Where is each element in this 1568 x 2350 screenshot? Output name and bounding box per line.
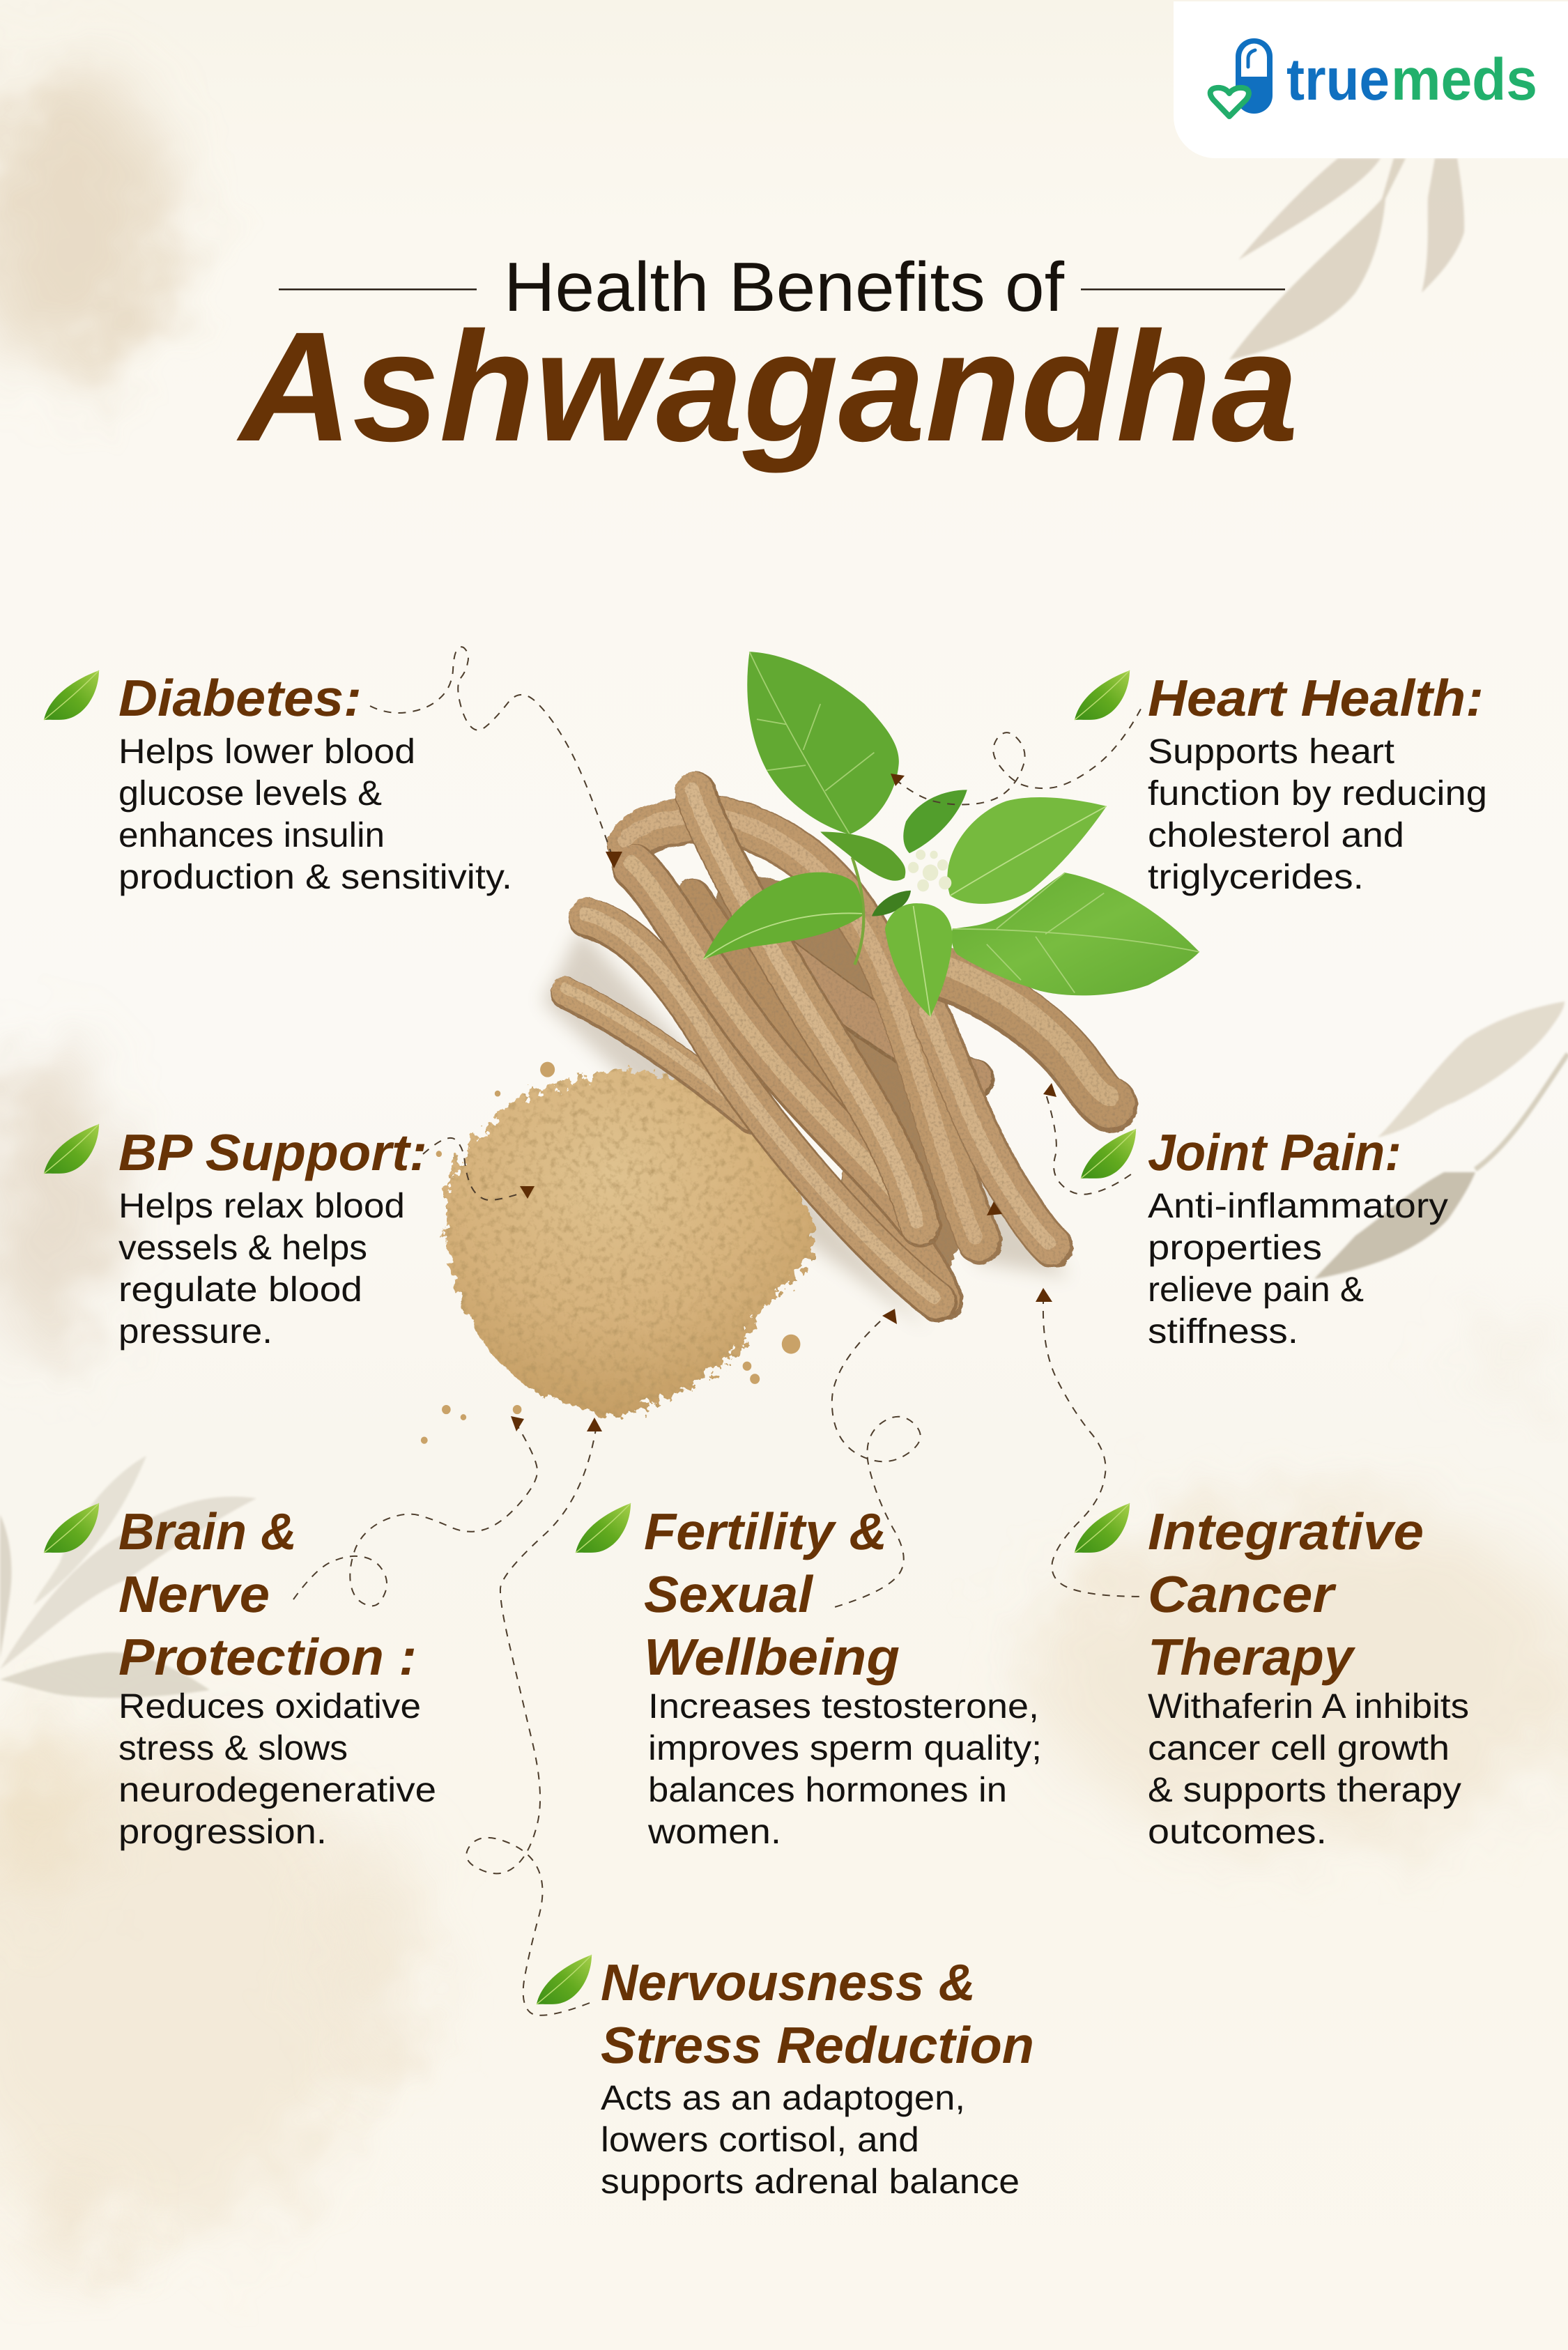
body text: improves sperm quality; [648, 1728, 1042, 1767]
body text: Anti-inflammatory [1148, 1186, 1448, 1225]
body text: cancer cell growth [1148, 1728, 1450, 1767]
body text: properties [1148, 1228, 1322, 1267]
powder mound [421, 1062, 815, 1444]
stem [852, 857, 863, 965]
dashed connector: nervousness [466, 1425, 597, 2015]
watercolour leaves: right middle [1314, 1001, 1568, 1279]
body text [1148, 732, 1487, 896]
benefit: heart health [1075, 669, 1487, 896]
body text: triglycerides. [1148, 857, 1364, 896]
body text: Withaferin A inhibits [1148, 1687, 1469, 1726]
powder crumbs [421, 1062, 800, 1444]
body text: Helps lower blood [118, 732, 415, 771]
title main word: Ashwagandha [236, 300, 1298, 474]
central image: powder, roots and leaves [421, 652, 1199, 1444]
heading: Heart Health: [1148, 669, 1484, 727]
heading: Nerve [118, 1565, 270, 1623]
body text: neurodegenerative [118, 1770, 436, 1809]
body text: outcomes. [1148, 1812, 1327, 1851]
heading: Wellbeing [644, 1628, 900, 1686]
dashed connector: integrative cancer therapy [1043, 1301, 1139, 1597]
leaf: upper right [947, 797, 1107, 904]
heading: Sexual [644, 1565, 813, 1623]
leaf: top big [747, 652, 899, 834]
leaf: small top [903, 790, 967, 853]
body text: vessels & helps [118, 1228, 367, 1267]
title line: Health Benefits of [504, 248, 1064, 326]
flower cluster [908, 850, 951, 891]
icon: leaf [1075, 670, 1130, 720]
body text: women. [647, 1812, 781, 1851]
green leaves [703, 652, 1199, 1017]
body text: Acts as an adaptogen, [601, 2078, 965, 2117]
dashed connector: brain [293, 1425, 537, 1606]
heading [118, 1503, 417, 1686]
benefit: nervousness and stress reduction [537, 1953, 1034, 2201]
body text: Supports heart [1148, 732, 1394, 771]
body text [1148, 1186, 1448, 1351]
arrowheads [511, 1186, 1052, 1431]
soft shadows [541, 929, 1070, 1328]
body text [1148, 1687, 1469, 1851]
logo text: meds [1391, 47, 1537, 113]
body text [118, 732, 512, 896]
body text: enhances insulin [118, 815, 385, 854]
heading: Cancer [1148, 1565, 1337, 1623]
body text: function by reducing [1148, 774, 1487, 813]
body text: balances hormones in [648, 1770, 1007, 1809]
body text [118, 1687, 436, 1851]
icon: leaf [1081, 1129, 1136, 1178]
title rule left [279, 289, 477, 290]
icon: leaf [44, 670, 99, 720]
roots core fill [713, 868, 977, 1282]
dashed connector: heart health [891, 709, 1141, 805]
body text: stress & slows [118, 1728, 348, 1767]
icon: leaf [1075, 1503, 1130, 1553]
heading: Stress Reduction [601, 2016, 1034, 2074]
icon: capsule with heart [1210, 38, 1273, 116]
body text: lowers cortisol, and [601, 2120, 919, 2159]
dashed connector: fertility [832, 1314, 921, 1607]
title [236, 248, 1298, 474]
heading: Protection : [118, 1628, 417, 1686]
heading: Fertility & [644, 1503, 887, 1560]
heading: BP Support: [118, 1123, 427, 1181]
logo text: true [1286, 47, 1390, 113]
watercolour leaves: bottom left [0, 1456, 256, 1698]
leaf: dark small [872, 891, 911, 916]
leaf: bottom [885, 903, 953, 1017]
body text: glucose levels & [118, 774, 382, 813]
benefit: brain and nerve protection [44, 1503, 436, 1851]
body text: & supports therapy [1148, 1770, 1461, 1809]
benefit: integrative cancer therapy [1075, 1503, 1469, 1851]
body text [601, 2078, 1020, 2201]
dashed connector: joint pain [1043, 1083, 1131, 1195]
icon: leaf [44, 1503, 99, 1553]
body text: production & sensitivity. [118, 857, 512, 896]
logo text [1286, 47, 1537, 113]
heading [1148, 1503, 1424, 1686]
watercolour leaves: top right [1229, 158, 1464, 360]
heading [601, 1953, 1034, 2074]
icon: leaf [537, 1955, 592, 2004]
leaf: large right [951, 873, 1199, 995]
heading: Brain & [118, 1503, 297, 1560]
title rule right [1081, 289, 1285, 290]
body text: cholesterol and [1148, 815, 1404, 854]
body text: regulate blood [118, 1270, 362, 1309]
body text: relieve pain & [1148, 1270, 1364, 1309]
body text: Increases testosterone, [648, 1687, 1039, 1726]
icon: leaf [44, 1124, 99, 1174]
heading: Diabetes: [118, 669, 362, 727]
roots [565, 790, 1112, 1302]
body text: supports adrenal balance [601, 2162, 1020, 2201]
body text: progression. [118, 1812, 327, 1851]
body text [118, 1186, 405, 1351]
heading [644, 1503, 900, 1686]
benefit: fertility and sexual wellbeing [576, 1503, 1042, 1851]
body text: Helps relax blood [118, 1186, 405, 1225]
body text: Reduces oxidative [118, 1687, 421, 1726]
heading: Therapy [1148, 1628, 1356, 1686]
body text [647, 1687, 1042, 1851]
heading: Joint Pain: [1148, 1123, 1401, 1181]
benefit: diabetes [44, 669, 512, 896]
heading: Integrative [1148, 1503, 1424, 1560]
logo panel [1174, 1, 1568, 158]
body text: stiffness. [1148, 1312, 1298, 1351]
leaf: inner [820, 831, 905, 881]
benefit: bp support [44, 1123, 427, 1351]
body text: pressure. [118, 1312, 272, 1351]
leaf: left [703, 873, 863, 960]
dashed connector: diabetes [370, 647, 622, 868]
benefit: joint pain [1081, 1123, 1448, 1351]
dashed connector: bp support [423, 1138, 521, 1200]
heading: Nervousness & [601, 1953, 976, 2011]
icon: leaf [576, 1503, 631, 1553]
